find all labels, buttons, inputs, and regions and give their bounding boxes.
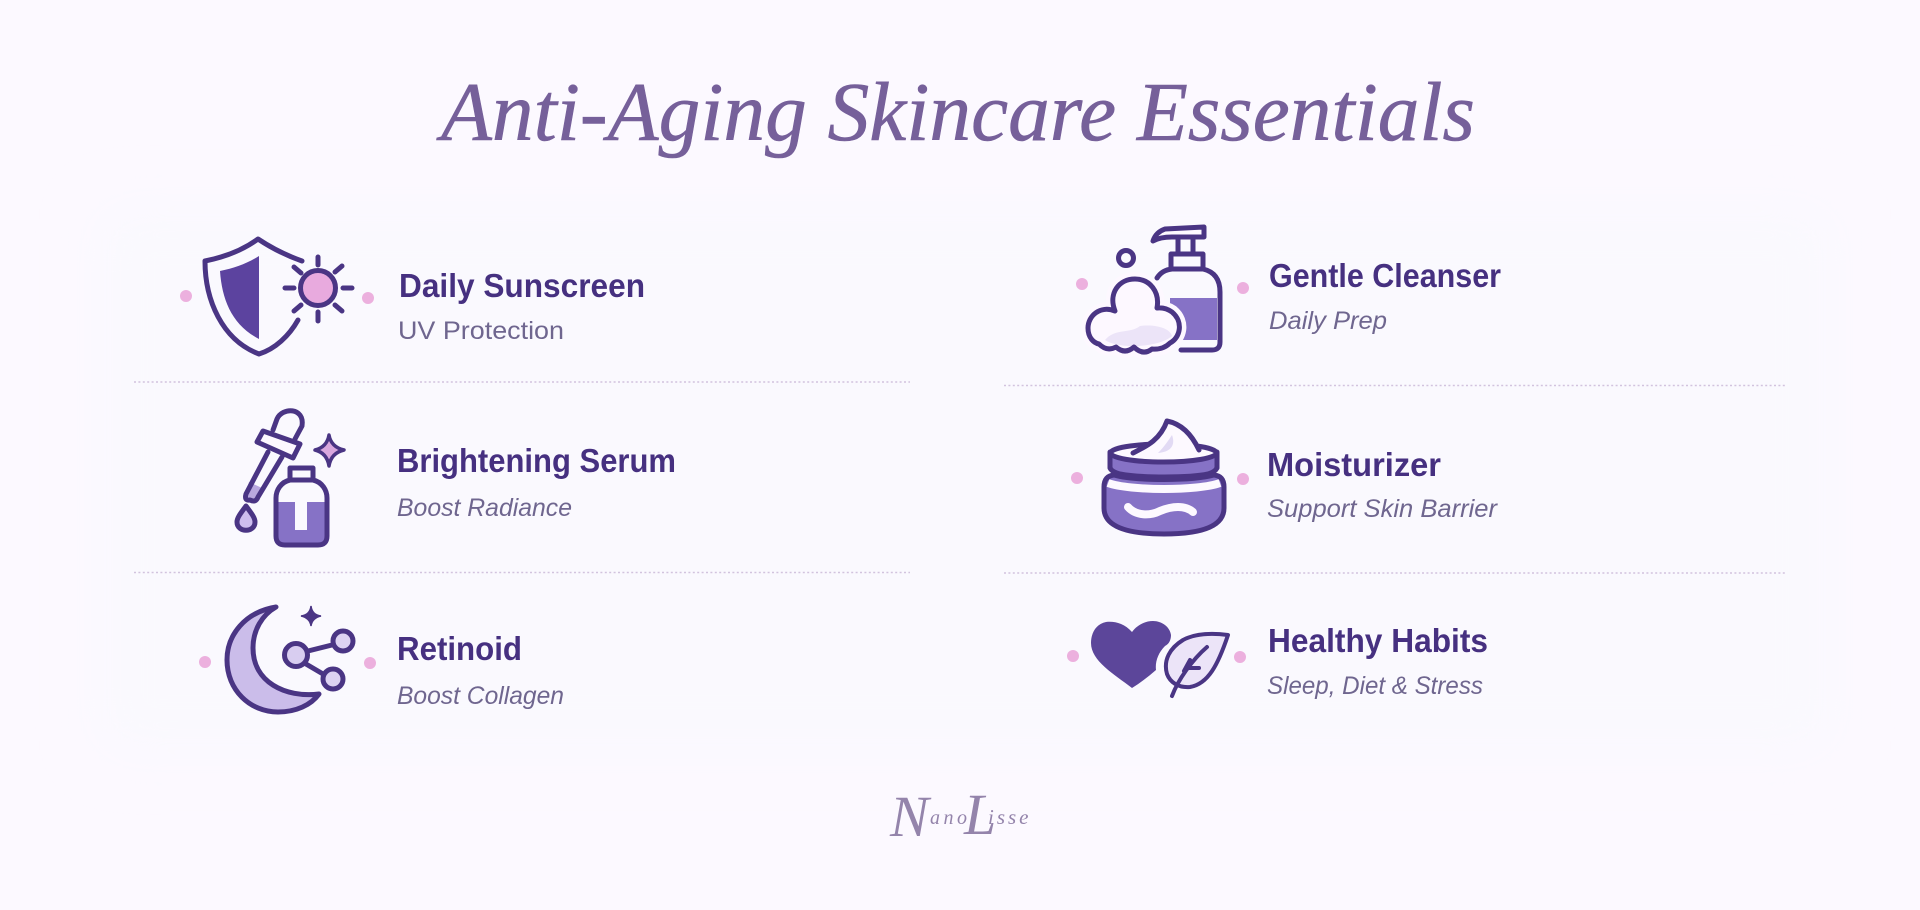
heading: healthy habits: Healthy Habits bbox=[1268, 622, 1488, 659]
subtitle: daily prep: Daily Prep bbox=[1269, 307, 1387, 335]
icon: heart and leaf bbox=[1091, 621, 1228, 696]
icon: pump bottle and foam bbox=[1088, 227, 1220, 352]
heading: retinoid: Retinoid bbox=[397, 630, 522, 667]
signature: NanoLisse: N bbox=[889, 784, 932, 849]
panel: gentle cleanser bbox=[1076, 227, 1501, 352]
title: Anti-Aging Skincare Essentials bbox=[436, 66, 1475, 159]
panel: retinoid bbox=[199, 606, 564, 712]
signature: NanoLisse: isse bbox=[988, 805, 1032, 829]
panel: healthy habits bbox=[1067, 621, 1488, 700]
subtitle: boost radiance: Boost Radiance bbox=[397, 494, 572, 522]
icon: moon and molecule bbox=[227, 606, 353, 712]
icon: dropper and bottle bbox=[237, 411, 344, 545]
panel: moisturizer bbox=[1071, 421, 1499, 534]
panel: brightening serum bbox=[237, 411, 676, 545]
subtitle: sleep, diet and stress: Sleep, Diet & Stress bbox=[1267, 672, 1483, 700]
heading: gentle cleanser: Gentle Cleanser bbox=[1269, 257, 1501, 294]
subtitle: support skin barrier: Support Skin Barrier bbox=[1267, 495, 1499, 523]
subtitle: boost collagen: Boost Collagen bbox=[397, 682, 564, 710]
icon: shield and sun bbox=[205, 239, 352, 354]
panel: daily sunscreen bbox=[180, 239, 645, 354]
heading: brightening serum: Brightening Serum bbox=[397, 442, 676, 479]
heading: moisturizer: Moisturizer bbox=[1267, 446, 1441, 483]
heading: daily sunscreen: Daily Sunscreen bbox=[399, 267, 645, 304]
icon: cream jar bbox=[1104, 421, 1224, 534]
subtitle: uv protection: UV Protection bbox=[398, 317, 564, 345]
signature: NanoLisse: L bbox=[963, 782, 996, 847]
signature: NanoLisse: ano bbox=[930, 807, 970, 829]
